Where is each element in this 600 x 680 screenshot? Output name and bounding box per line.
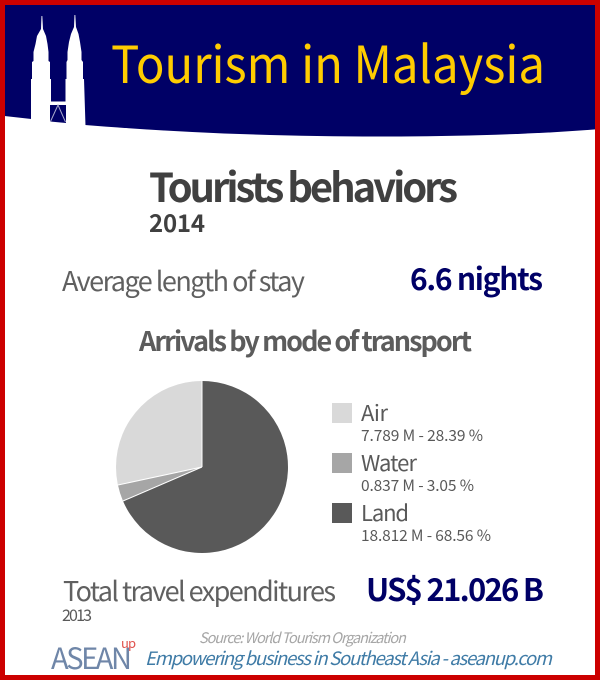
value: expenditures: US$ 21.026 B [366, 565, 544, 610]
label: average length of stay: Average length of stay [62, 260, 305, 299]
header band [0, 0, 600, 137]
legend: water: 0.837 M - 3.05 % [361, 474, 474, 496]
heading: year 2014: 2014 [149, 204, 205, 239]
label: total travel expenditures: Total travel expenditures [63, 570, 336, 609]
tagline: Empowering business in Southeast Asia - aseanup.com [145, 645, 553, 671]
logo: ASEAN up: up [121, 633, 136, 652]
value: nights: 6.6 nights [410, 255, 543, 299]
icon: twin towers [31, 15, 86, 126]
heading: tourists behaviors: Tourists behaviors [149, 156, 458, 214]
legend: land: Land [361, 496, 409, 528]
chart heading: Arrivals by mode of transport [138, 320, 472, 359]
title: Tourism in Malaysia [111, 24, 545, 98]
legend: water [332, 446, 474, 496]
legend: air: Air [361, 396, 388, 428]
pie chart [116, 381, 288, 553]
label: year 2013: 2013 [62, 602, 92, 626]
legend: water: Water [361, 446, 417, 478]
legend: air [332, 396, 483, 446]
legend: land [332, 496, 491, 546]
legend: land: 18.812 M - 68.56 % [361, 524, 491, 546]
source: Source: World Tourism Organization [199, 627, 407, 648]
legend: air: 7.789 M - 28.39 % [361, 424, 483, 446]
logo: ASEAN up: ASEAN [51, 636, 132, 678]
